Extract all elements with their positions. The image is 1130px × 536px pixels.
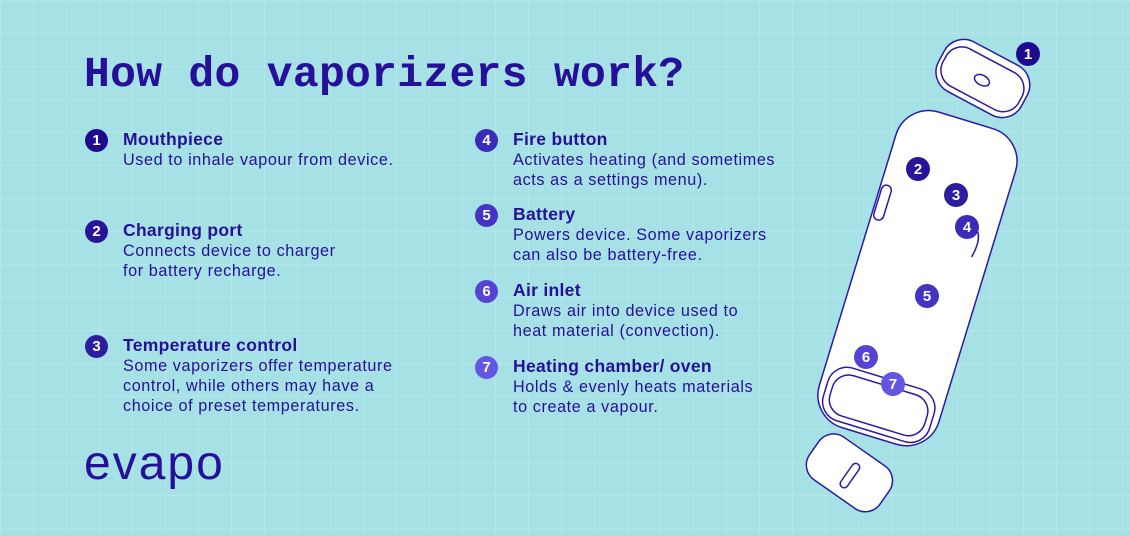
item 3: temperature control: control, while others may have a: [123, 377, 374, 395]
item 7: heating chamber: [475, 356, 753, 416]
marker 6: 6: [862, 349, 870, 366]
item 4: fire button: acts as a settings menu).: [513, 171, 708, 189]
item 1: mouthpiece: 1: [92, 132, 101, 149]
item 1: mouthpiece: Used to inhale vapour from device.: [123, 151, 394, 169]
item 2: charging port: Connects device to charger: [123, 242, 336, 260]
item 7: heating chamber: Holds & evenly heats materials: [513, 378, 753, 396]
item 5: battery: can also be battery-free.: [513, 246, 703, 264]
item 3: temperature control: [85, 335, 393, 415]
mouthpiece part: [928, 32, 1038, 125]
item 2: charging port: Charging port: [123, 220, 243, 240]
marker 6: [854, 345, 878, 369]
main body: [809, 102, 1025, 454]
marker 2: [906, 157, 930, 181]
item 6: air inlet: 6: [482, 283, 491, 300]
marker 2: 2: [914, 161, 922, 178]
marker 4: 4: [963, 219, 972, 236]
item 2: charging port: for battery recharge.: [123, 262, 281, 280]
marker 3: 3: [952, 187, 960, 204]
item 5: battery: [475, 204, 767, 264]
marker 1: 1: [1024, 46, 1032, 63]
item 4: fire button: Fire button: [513, 129, 608, 149]
logo: evapo: [84, 437, 225, 490]
marker 7: 7: [889, 376, 897, 393]
marker 7: [881, 372, 905, 396]
item 6: air inlet: heat material (convection).: [513, 322, 720, 340]
item 7: heating chamber: to create a vapour.: [513, 398, 658, 416]
item 3: temperature control: choice of preset temperatures.: [123, 397, 360, 415]
item 2: charging port: [85, 220, 336, 280]
item 7: heating chamber: Heating chamber/ oven: [513, 356, 712, 376]
item 2: charging port: 2: [92, 223, 101, 240]
item 3: temperature control: Some vaporizers offer temperature: [123, 357, 393, 375]
item 5: battery: 5: [482, 207, 491, 224]
item 4: fire button: 4: [482, 132, 491, 149]
marker 5: [915, 284, 939, 308]
marker 1: [1016, 42, 1040, 66]
item 1: mouthpiece: Mouthpiece: [123, 129, 223, 149]
marker 4: [955, 215, 979, 239]
item 6: air inlet: Air inlet: [513, 280, 581, 300]
item 3: temperature control: Temperature control: [123, 335, 298, 355]
item 6: air inlet: [475, 280, 738, 340]
bottom cap: [799, 427, 900, 519]
item 1: mouthpiece: [85, 129, 394, 169]
item 4: fire button: [475, 129, 775, 189]
marker 5: 5: [923, 288, 931, 305]
item 6: air inlet: Draws air into device used to: [513, 302, 738, 320]
marker 3: [944, 183, 968, 207]
item 5: battery: Powers device. Some vaporizers: [513, 226, 767, 244]
title: How do vaporizers work?: [84, 50, 684, 99]
item 7: heating chamber: 7: [482, 359, 491, 376]
item 5: battery: Battery: [513, 204, 575, 224]
item 3: temperature control: 3: [92, 338, 101, 355]
item 4: fire button: Activates heating (and sometimes: [513, 151, 775, 169]
